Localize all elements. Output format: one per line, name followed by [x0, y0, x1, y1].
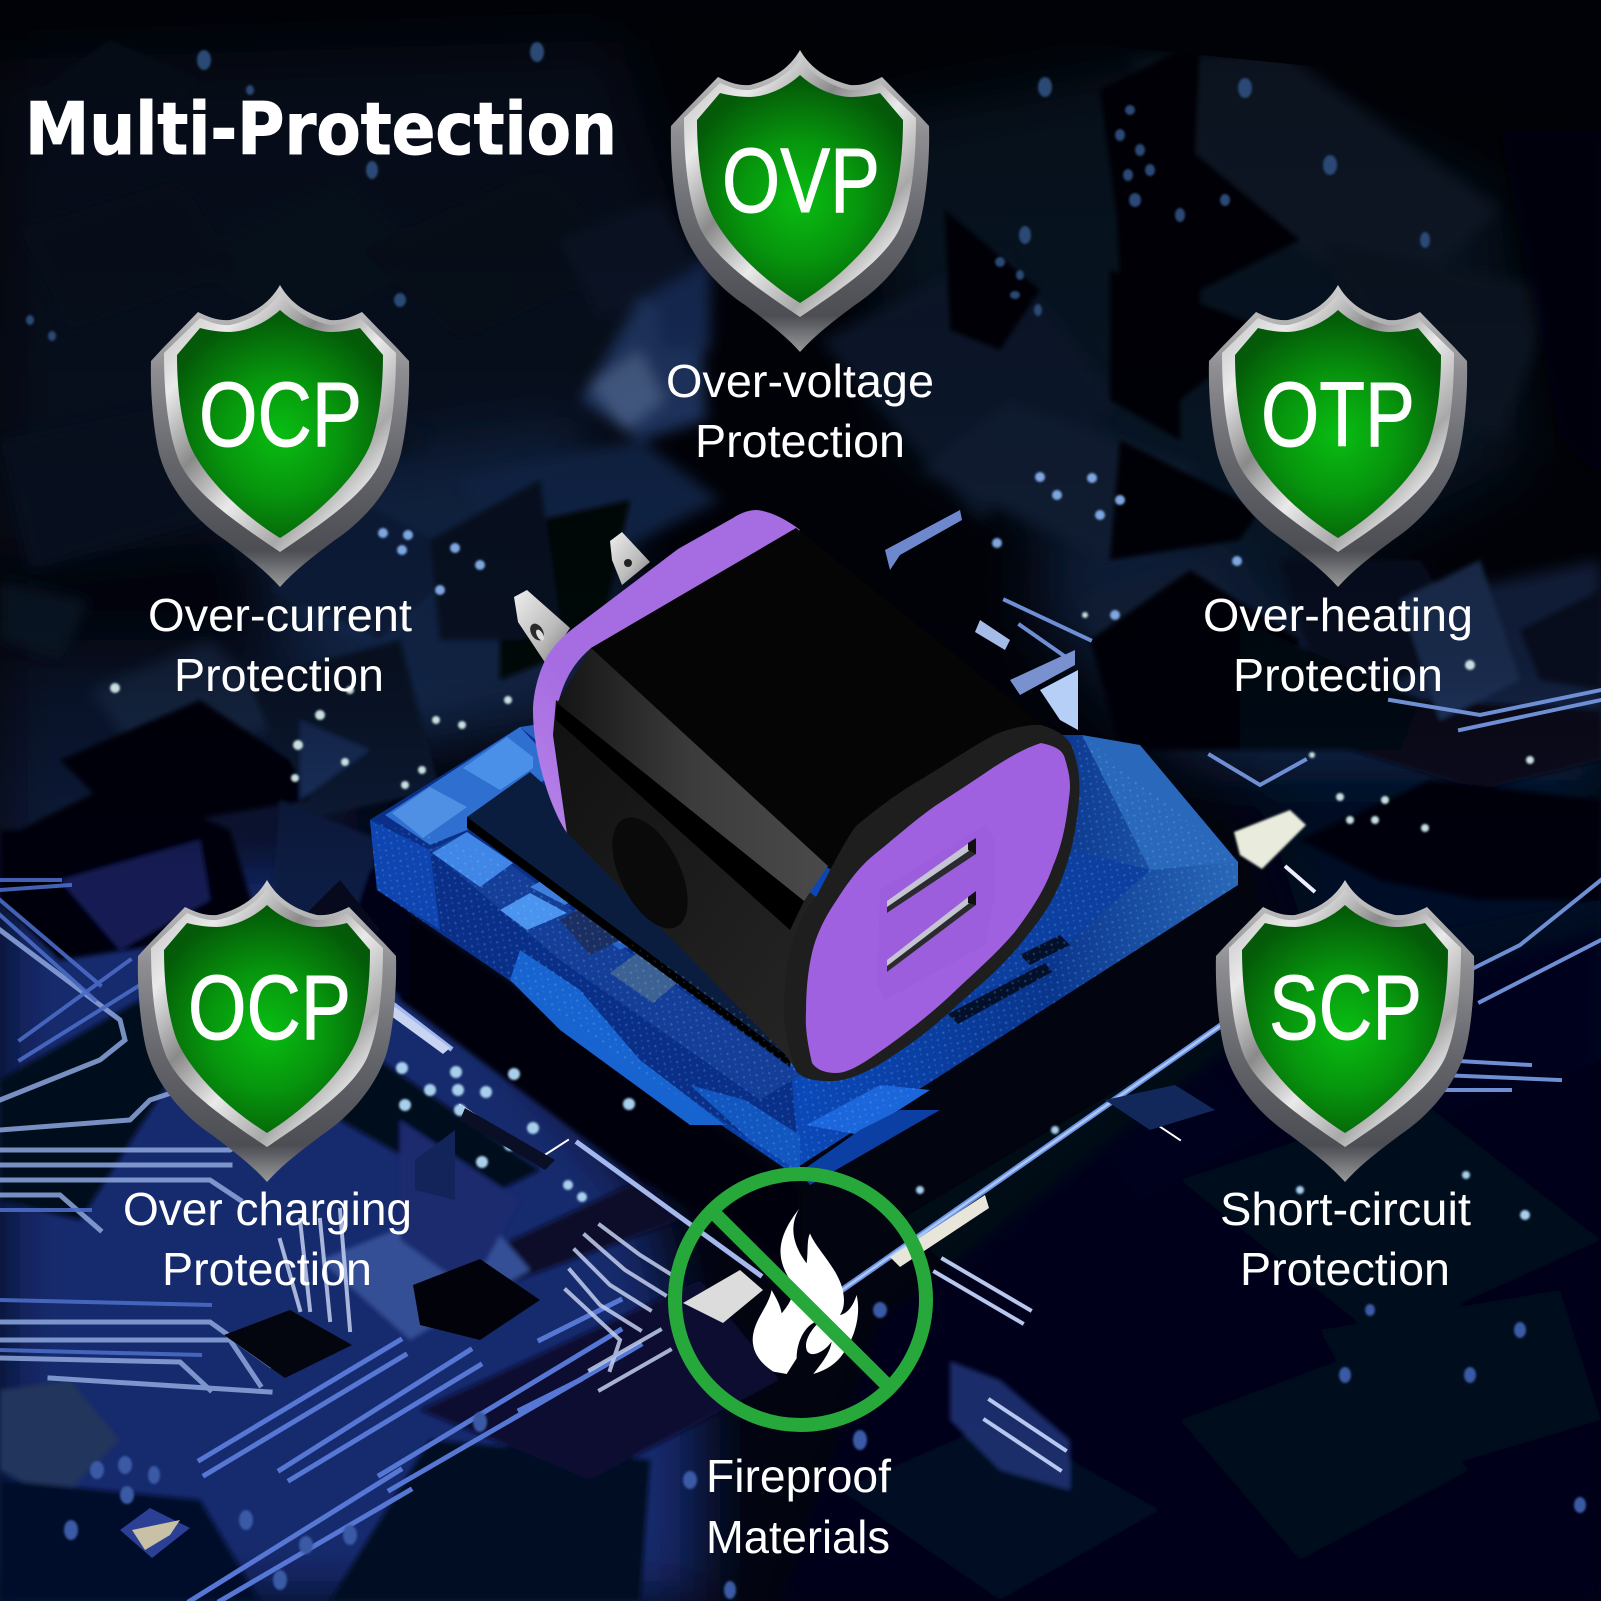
shield: OCP over-current — [151, 285, 409, 587]
shield: SCP: SCP — [1269, 957, 1422, 1059]
dim lower right — [780, 930, 1601, 1601]
flame — [753, 1209, 858, 1374]
shield: OCP over charging — [138, 880, 396, 1182]
label: over-heating: Over-heating — [1203, 589, 1473, 641]
charger — [514, 510, 1079, 1081]
label: over-heating — [1203, 589, 1473, 701]
label: over-current: Protection — [174, 649, 384, 701]
label: short-circuit — [1220, 1183, 1471, 1295]
body side — [553, 700, 820, 1075]
label: over-current: Over-current — [148, 589, 412, 641]
back purple band — [533, 510, 800, 833]
label: short-circuit: Protection — [1240, 1243, 1450, 1295]
shield: SCP — [1216, 880, 1474, 1182]
USB ports — [877, 825, 995, 1000]
label: over charging: Over charging — [123, 1183, 412, 1235]
chip platform under charger — [370, 720, 1238, 1185]
front rim — [784, 725, 1079, 1081]
gray stripe — [557, 648, 828, 901]
small components and black blocks on board — [120, 510, 1215, 1558]
traces — [0, 600, 1601, 1601]
side oval — [597, 806, 703, 940]
prohibition circle — [675, 1174, 926, 1425]
label: fireproof: Fireproof — [706, 1450, 891, 1502]
shield: OVP: OVP — [722, 130, 880, 232]
label: over-voltage: Over-voltage — [666, 355, 934, 407]
label: fireproof: Materials — [706, 1511, 890, 1563]
label: fireproof — [706, 1450, 891, 1563]
shield: OTP: OTP — [1261, 364, 1415, 466]
label: over-voltage — [666, 355, 934, 467]
shield: OVP — [671, 50, 929, 352]
title: Multi-Protection — [25, 87, 617, 171]
label: over-heating: Protection — [1233, 649, 1443, 701]
icon: no fire — [675, 1174, 926, 1425]
shield: OCP over-current: OCP — [199, 364, 362, 466]
shield: OTP — [1209, 285, 1467, 587]
black stripe — [555, 703, 804, 930]
prong: lower — [514, 590, 570, 664]
label: over charging — [123, 1183, 412, 1295]
front purple face — [806, 743, 1070, 1073]
body top face — [591, 528, 1045, 900]
label: over charging: Protection — [162, 1243, 372, 1295]
label: short-circuit: Short-circuit — [1220, 1183, 1471, 1235]
shield: OCP over charging: OCP — [188, 957, 351, 1059]
label: over-current — [148, 589, 412, 701]
prong: upper — [610, 532, 650, 585]
label: over-voltage: Protection — [695, 415, 905, 467]
